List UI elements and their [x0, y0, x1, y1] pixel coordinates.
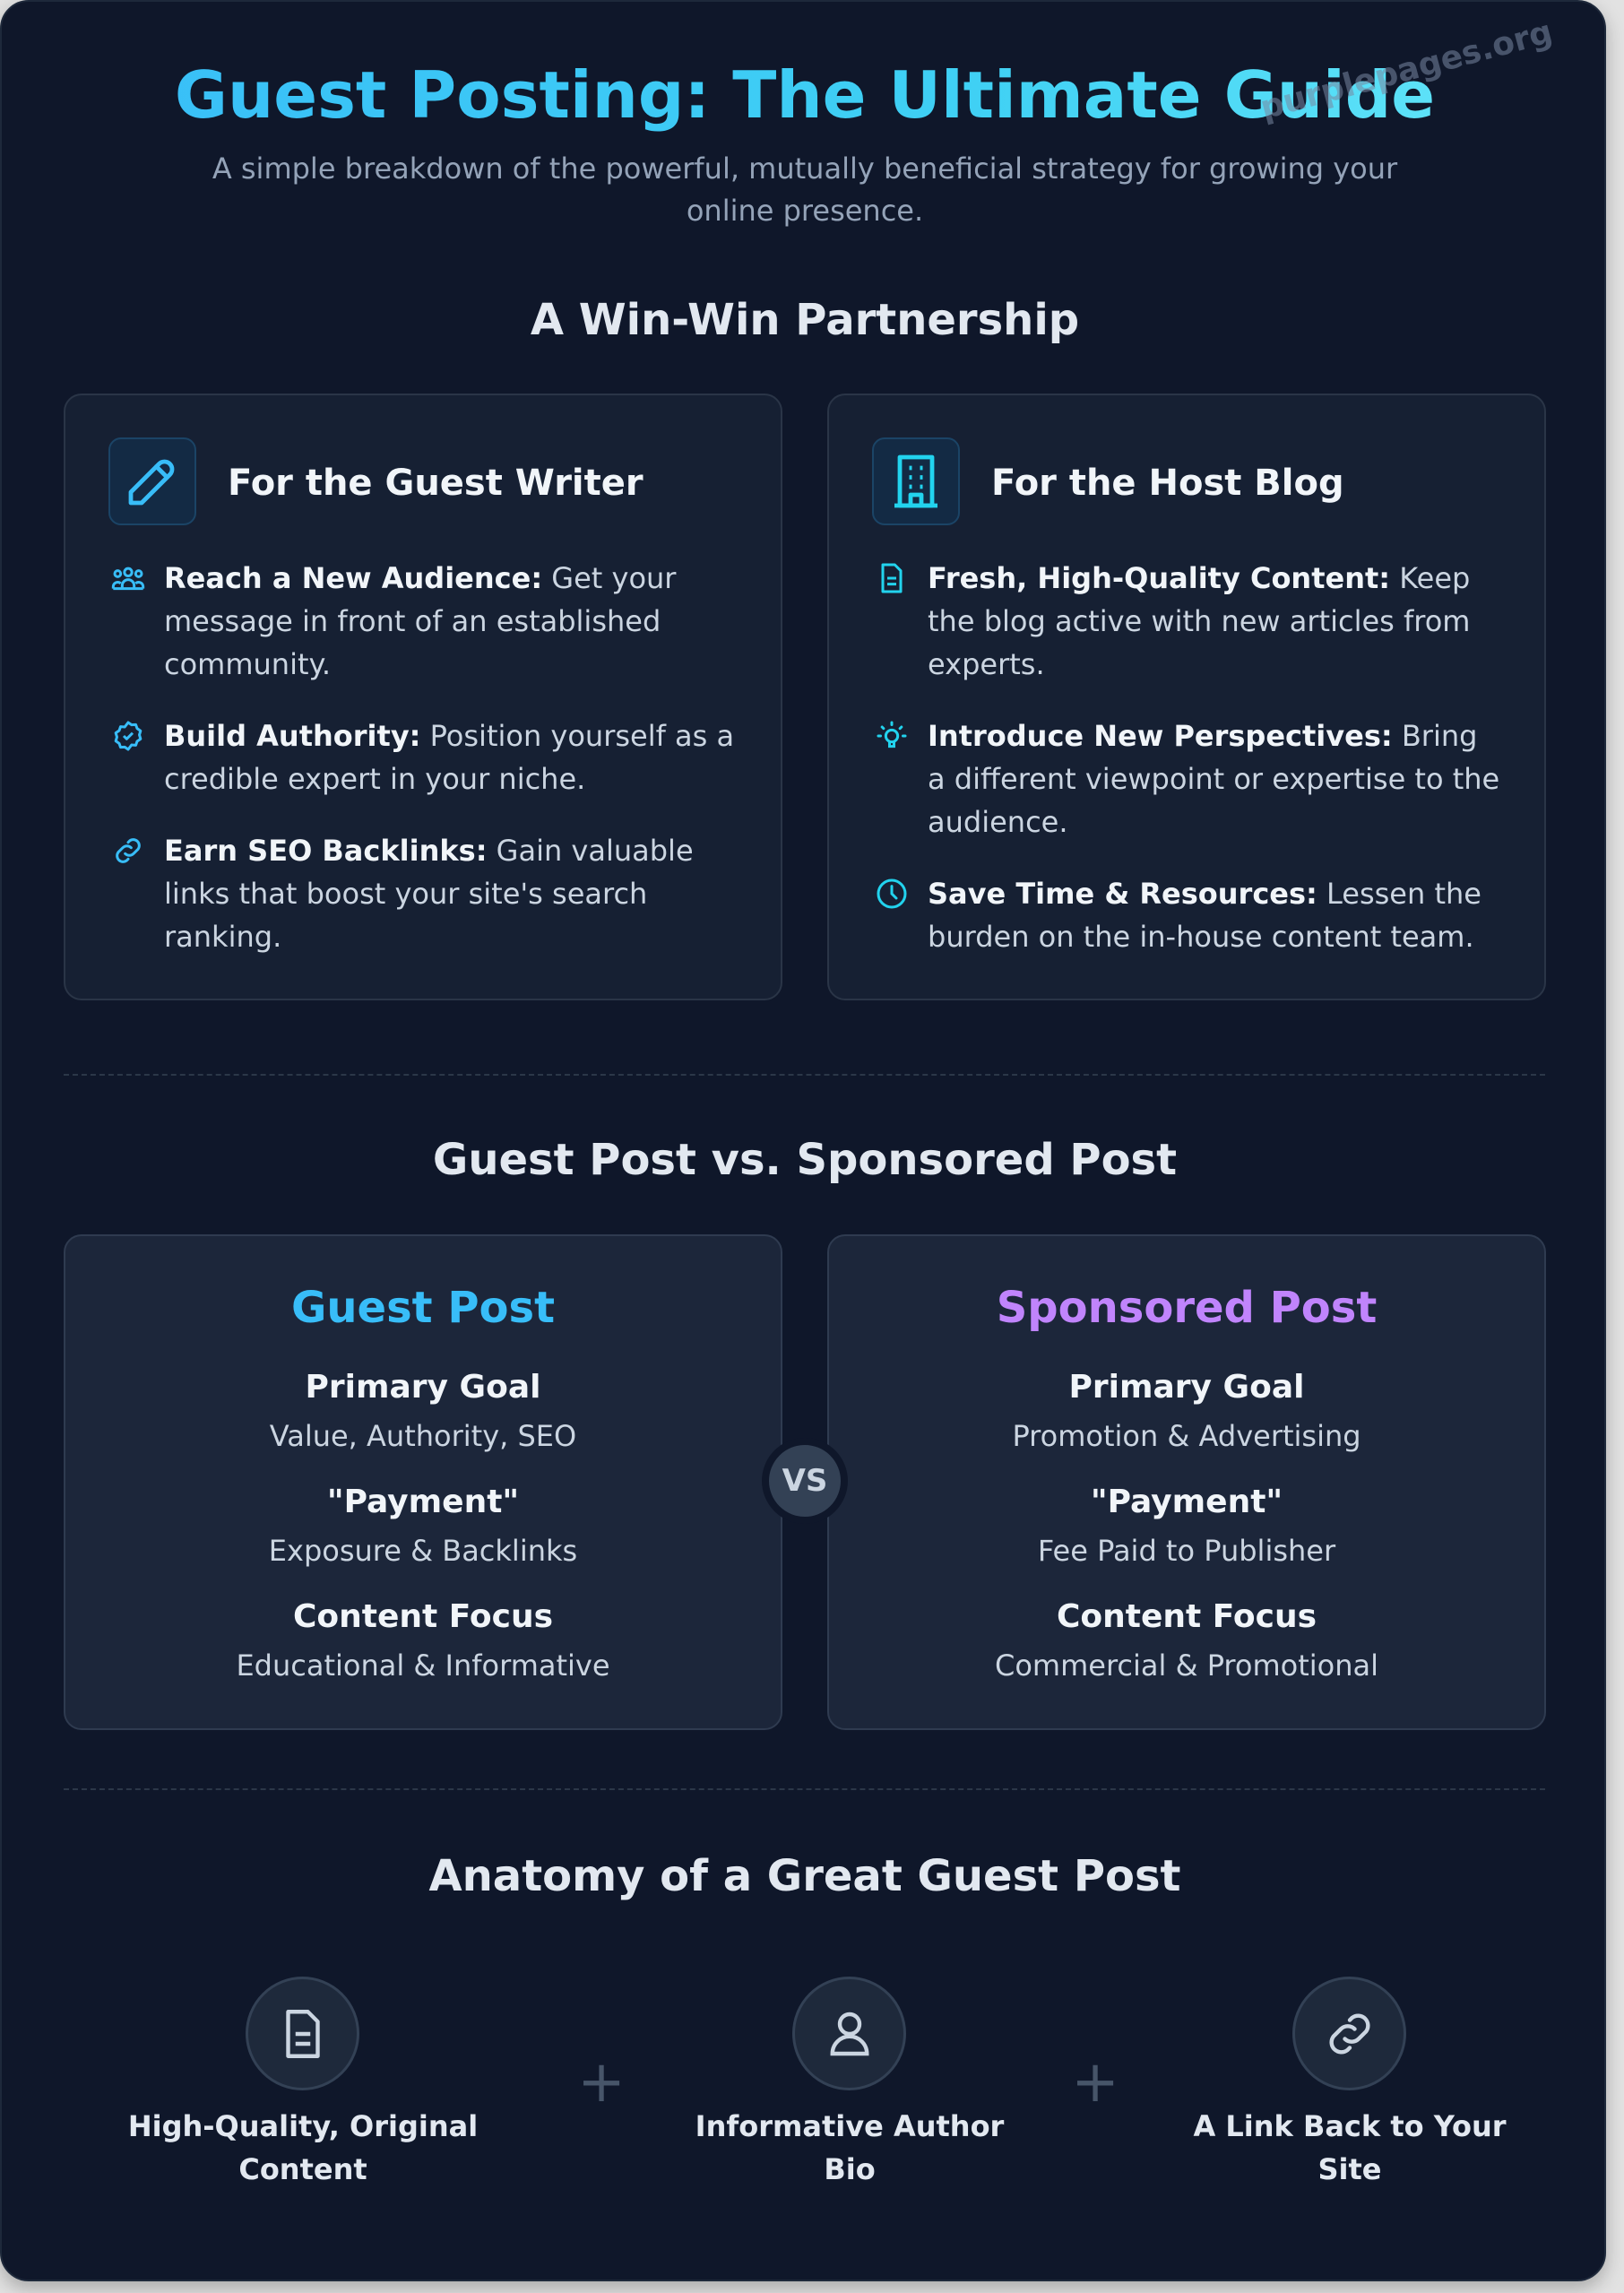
subtitle: [212, 151, 1398, 228]
plus 2: +: [1071, 2049, 1119, 2116]
guest post details: Exposure & Backlinks: [269, 1534, 577, 1568]
label: Bio: [824, 2152, 876, 2186]
item: save time: Save Time & Resources: Lessen the burden on the in-house content team.: [928, 877, 1481, 954]
panel: sponsored post: [827, 1234, 1546, 1730]
anatomy: content: [128, 1977, 478, 2186]
label: [128, 2109, 478, 2186]
vs badge: [762, 1438, 848, 1524]
icon: pencil: [108, 437, 196, 525]
plus 1: +: [577, 2049, 626, 2116]
heading: win-win: A Win-Win Partnership: [531, 295, 1079, 345]
item: authority: Build Authority: Position yourself as a credible expert in your niche.: [164, 719, 734, 796]
subtitle: online presence.: [687, 194, 923, 228]
heading: comparison: Guest Post vs. Sponsored Post: [433, 1135, 1177, 1185]
sponsored details: Content Focus: [1057, 1598, 1317, 1635]
sponsored details: "Payment": [1091, 1484, 1283, 1520]
sponsored details: [995, 1369, 1378, 1683]
panel: guest post: [64, 1234, 782, 1730]
item: fresh content: Fresh, High-Quality Content: Keep the blog active with new articles from experts.: [928, 561, 1470, 681]
panel: guest writer: [64, 394, 782, 1000]
label: [1193, 2109, 1507, 2186]
guest post details: "Payment": [327, 1484, 519, 1520]
card heading: For the Host Blog: [991, 463, 1344, 504]
item: reach audience: Reach a New Audience: Get your message in front of an established community.: [164, 561, 676, 681]
anatomy: link: [1193, 1977, 1507, 2186]
icon: person: [792, 1977, 906, 2090]
label: Content: [238, 2152, 367, 2186]
sponsored details: Promotion & Advertising: [1012, 1419, 1361, 1453]
item: perspectives: Introduce New Perspectives: Bring a different viewpoint or expertise to the audience.: [928, 719, 1499, 839]
guest post details: Educational & Informative: [236, 1648, 610, 1683]
icon: document: [246, 1977, 359, 2090]
anatomy: bio: [695, 1977, 1004, 2186]
item: backlinks: Earn SEO Backlinks: Gain valuable links that boost your site's search ranking.: [164, 834, 694, 954]
guest post title: Guest Post: [291, 1283, 555, 1333]
icon: building: [872, 437, 960, 525]
subtitle: A simple breakdown of the powerful, mutually beneficial strategy for growing your: [212, 151, 1397, 186]
sponsored details: Fee Paid to Publisher: [1038, 1534, 1335, 1568]
watermark: purplepages.org: [1257, 13, 1556, 127]
guest post details: [236, 1369, 610, 1683]
sponsored title: Sponsored Post: [997, 1283, 1377, 1333]
guest post details: Content Focus: [293, 1598, 553, 1635]
icon: link: [1292, 1977, 1406, 2090]
label: A Link Back to Your: [1193, 2109, 1507, 2143]
guest post details: Value, Authority, SEO: [270, 1419, 576, 1453]
panel: host blog: [827, 394, 1546, 1000]
label: Site: [1317, 2152, 1382, 2186]
label: High-Quality, Original: [128, 2109, 478, 2143]
label: Informative Author: [695, 2109, 1004, 2143]
card heading: For the Guest Writer: [228, 463, 644, 504]
sponsored details: Primary Goal: [1069, 1369, 1304, 1406]
vs badge: VS: [782, 1463, 827, 1499]
guest post details: Primary Goal: [306, 1369, 540, 1406]
heading: anatomy: Anatomy of a Great Guest Post: [428, 1851, 1181, 1901]
sponsored details: Commercial & Promotional: [995, 1648, 1378, 1683]
label: [695, 2109, 1004, 2186]
title: Guest Posting: The Ultimate Guide: [175, 57, 1435, 133]
